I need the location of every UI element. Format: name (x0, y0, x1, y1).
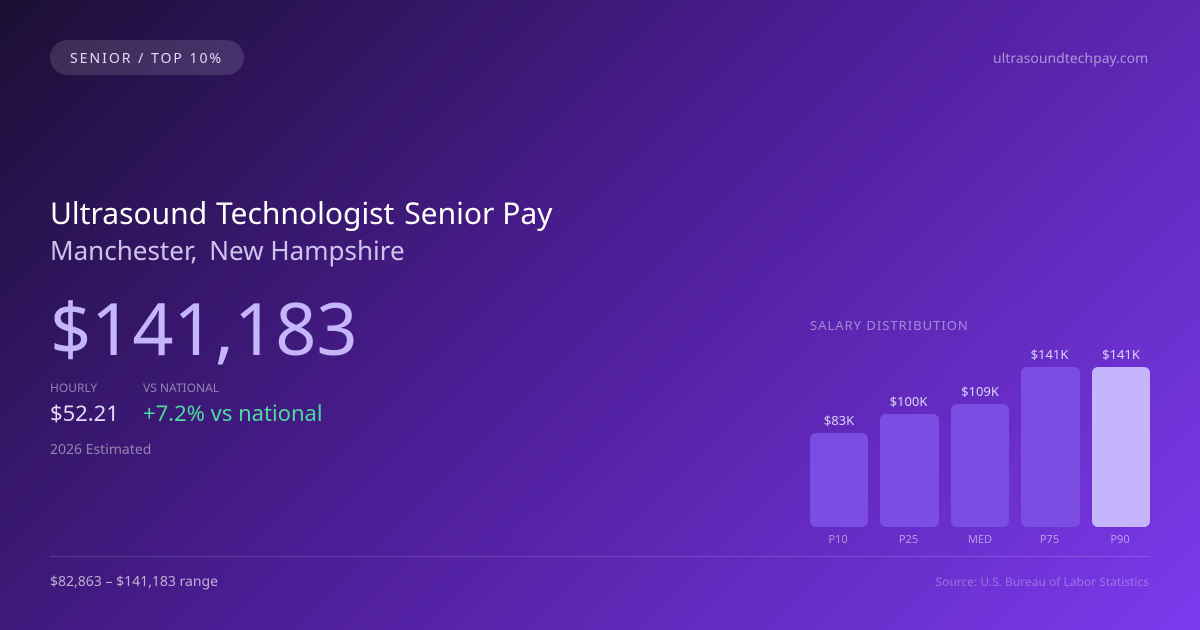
chart: salary distribution (810, 316, 1150, 547)
stat: hourly: $52.21 (50, 398, 119, 428)
bar P10: $83K (824, 411, 854, 429)
badge: senior / top 10% (50, 40, 244, 75)
bar P75: P75 (1040, 532, 1059, 547)
bar P25: P25 (899, 532, 918, 547)
stat: vs national: VS NATIONAL (143, 379, 219, 396)
source note: Source: U.S. Bureau of Labor Statistics (936, 573, 1149, 590)
bar P90: P90 (1110, 532, 1130, 547)
bar P90: $141K (1102, 345, 1140, 363)
estimate note: 2026 Estimated (50, 440, 151, 459)
stat: vs national (143, 379, 323, 428)
stat: hourly (50, 379, 119, 428)
bar P10: P10 (828, 532, 848, 547)
title: Ultrasound Technologist Senior Pay (50, 192, 552, 233)
bar P10 (810, 411, 868, 547)
bar P25: $100K (890, 392, 927, 410)
bar median: $109K (961, 382, 999, 400)
bar median (951, 382, 1009, 547)
location subtitle: Manchester, New Hampshire (50, 232, 405, 268)
site url: ultrasoundtechpay.com (993, 49, 1148, 68)
main salary figure: $141,183 (50, 279, 358, 377)
bar P25 (880, 392, 939, 547)
stat: vs national: +7.2% vs national (143, 398, 323, 428)
bar median: MED (968, 532, 992, 547)
chart heading: SALARY DISTRIBUTION (810, 316, 969, 334)
bar P75 (1021, 345, 1080, 547)
bar P90 (1092, 345, 1150, 547)
badge: senior / top 10%: SENIOR / TOP 10% (70, 49, 223, 68)
stat: hourly: HOURLY (50, 379, 97, 396)
salary range: $82,863 – $141,183 range (50, 572, 218, 591)
bar P75: $141K (1031, 345, 1068, 363)
